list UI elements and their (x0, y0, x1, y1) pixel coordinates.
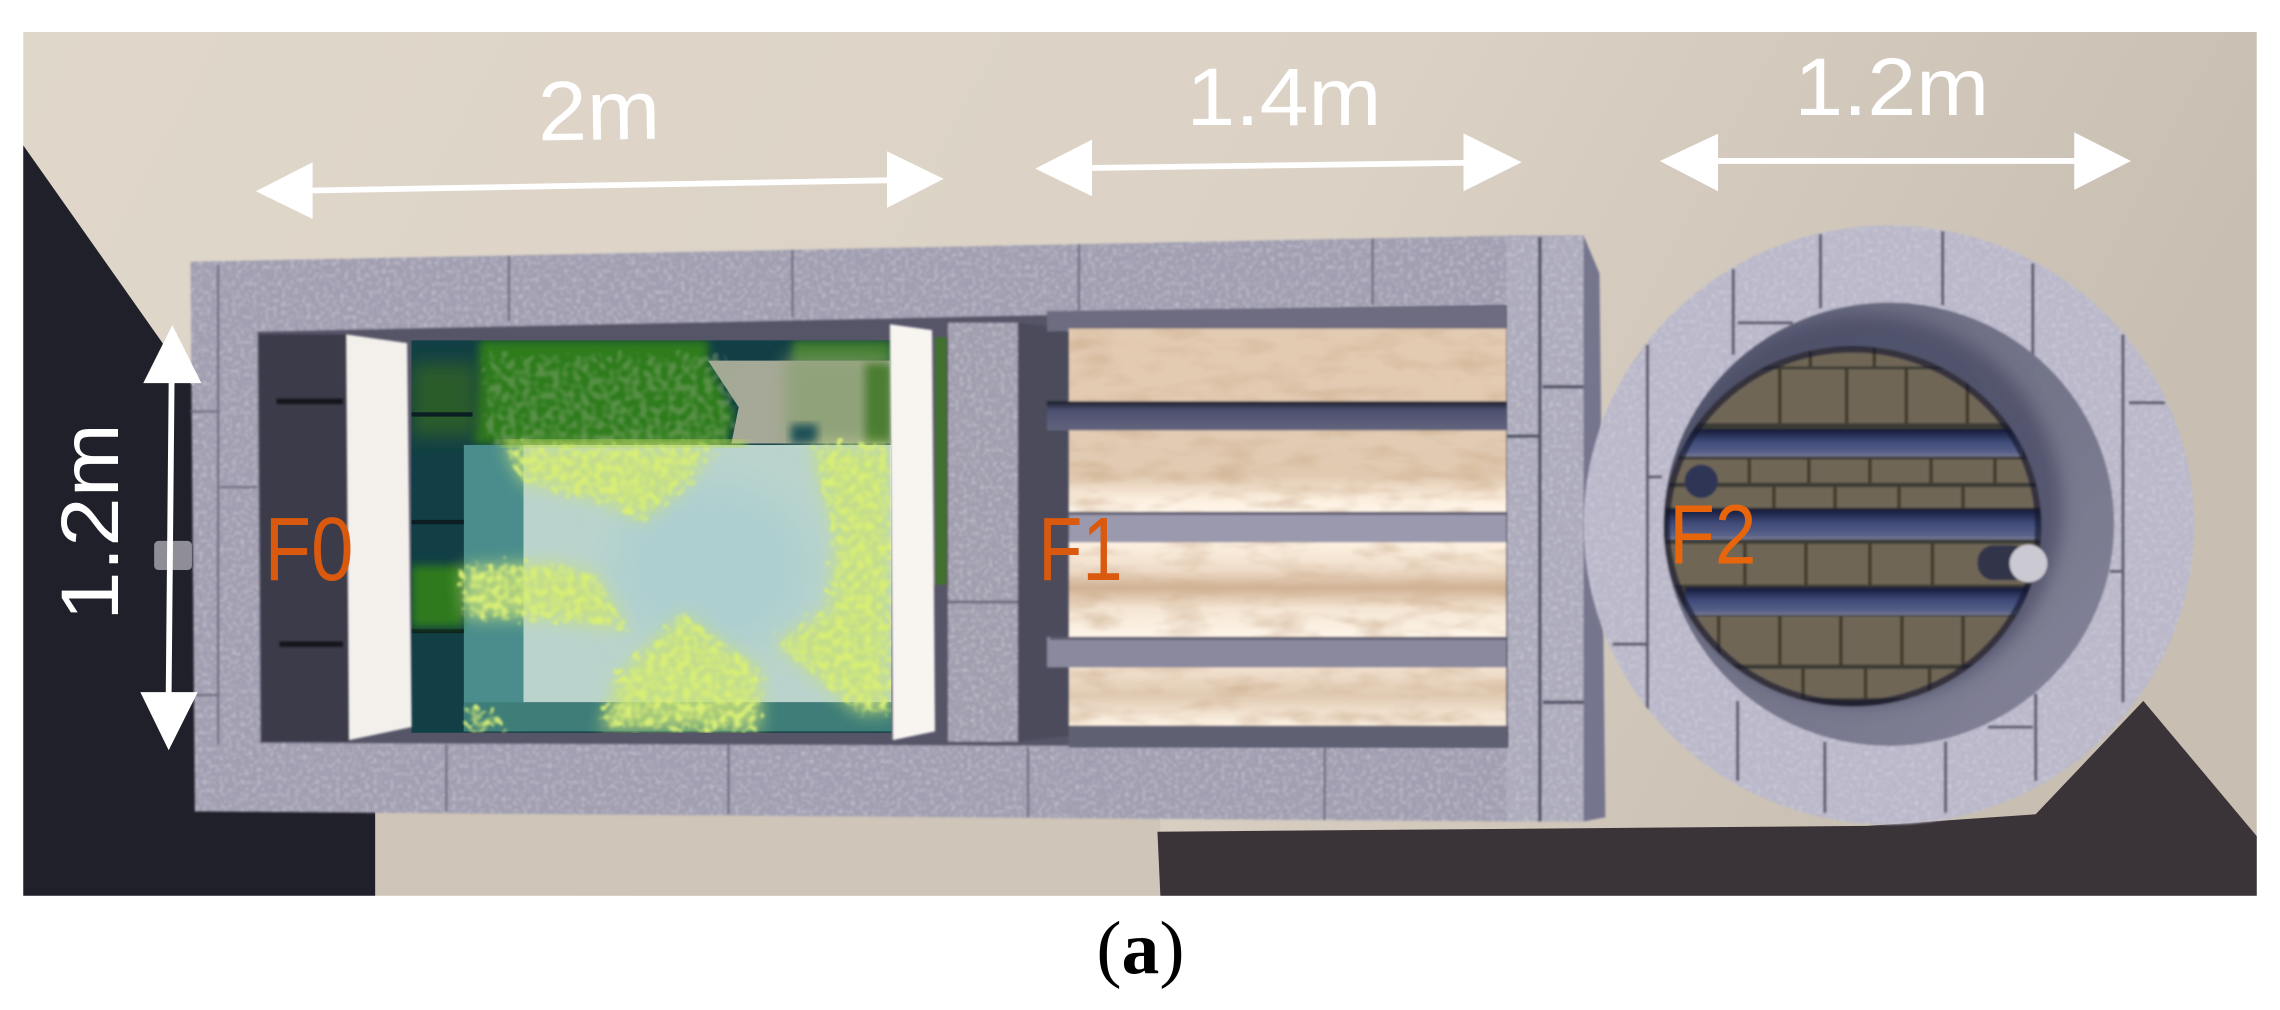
outer concrete disc (1583, 225, 2194, 824)
sand band 2 (1069, 429, 1506, 513)
section label: F1: F1 (1038, 499, 1123, 600)
F0 filter panels (346, 324, 947, 740)
white outlet pipe (1978, 545, 2047, 582)
F2 circular tank (1583, 225, 2194, 824)
inlet pipe stub (154, 541, 192, 570)
caption: (a) (1096, 907, 1185, 990)
top-right green (792, 340, 891, 364)
bright line at water edge (502, 441, 746, 446)
F0 chamber dark interior (259, 334, 349, 742)
sand band 1 (1069, 329, 1506, 401)
teal shallow band (464, 445, 525, 731)
lower sand frame (1069, 726, 1508, 747)
F0 water and moss tank (412, 340, 891, 733)
pale water surface (523, 445, 891, 702)
right dark shadow (1157, 701, 2257, 896)
dimension arrow: 1.4m (1035, 133, 1522, 196)
water blue centre haze (621, 490, 804, 640)
tank inner opening (257, 305, 1508, 747)
dark lines left floor (412, 414, 473, 631)
dimension arrow: 1.2m circle (1660, 132, 2131, 191)
brick floor (1662, 345, 2042, 708)
moss strip beside panel (935, 337, 947, 585)
bottom teal strip (464, 702, 891, 731)
wall block joints (190, 238, 1373, 820)
F2 pipes (1666, 429, 2042, 615)
dimension label: 1.4m: 1.4m (1187, 52, 1381, 143)
section label: F0: F0 (265, 499, 353, 600)
side moss (412, 566, 462, 627)
disc joints (1613, 231, 2165, 813)
upper sand frame (1047, 305, 1506, 332)
dimension label: 2m: 2m (537, 63, 661, 158)
dimension arrow: 2m (256, 151, 944, 219)
moss speckle top (487, 356, 734, 443)
F1 chamber interior (1018, 323, 1070, 742)
concrete tank structure (190, 236, 1605, 822)
F1 sand filter (1047, 305, 1508, 747)
floor edge shadow (1666, 349, 2039, 704)
dark small pipe opening (1685, 465, 1718, 498)
left dark shadow (23, 145, 375, 896)
sand band 3 (1069, 541, 1506, 638)
brick rows (1658, 348, 2065, 698)
right end wall (1506, 237, 1583, 822)
section label: F2: F2 (1669, 487, 1757, 581)
white panel left (346, 334, 412, 740)
white panel right (890, 324, 935, 740)
dimension label: 1.2m top: 1.2m (1794, 42, 1989, 133)
sand band 4 (1069, 666, 1506, 726)
dimension label: vertical 1.2m: 1.2m (45, 423, 136, 621)
right wall side face (1583, 236, 1605, 822)
brick joints (1719, 346, 1995, 698)
outer concrete walls (190, 236, 1605, 822)
grey top right slab (708, 356, 891, 443)
dimension arrow: vertical 1.2m (140, 325, 201, 750)
yellow-green moss haze (461, 446, 890, 730)
divider block (948, 323, 1018, 742)
F1 pipes (1047, 401, 1506, 667)
dim moss on left (412, 364, 477, 436)
inner ring wall (1661, 302, 2114, 746)
top moss patch (474, 340, 734, 443)
moss speckle (461, 446, 890, 731)
